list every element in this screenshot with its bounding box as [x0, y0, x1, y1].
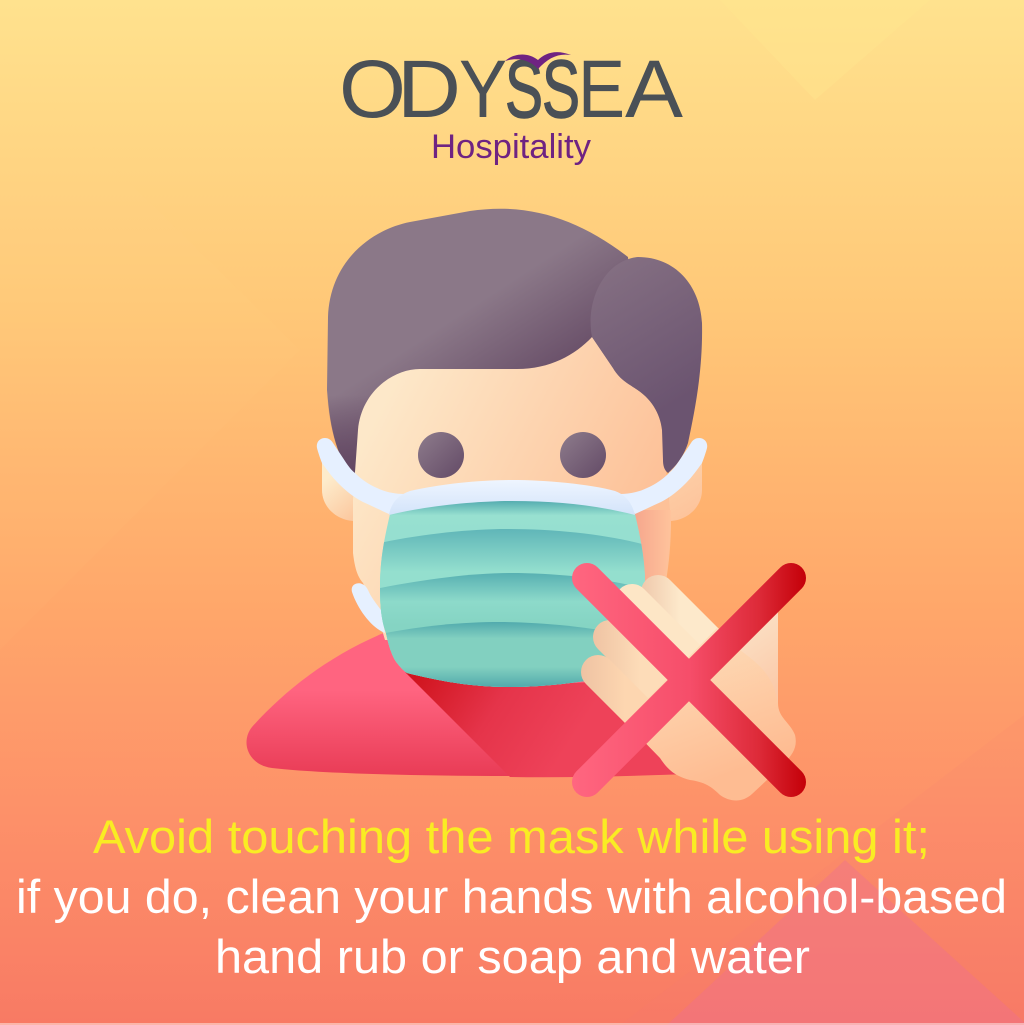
- logo: Odyssea Hospitality: [339, 44, 683, 166]
- pleats: [375, 495, 650, 690]
- mask straps: [317, 438, 707, 633]
- hand: [598, 576, 796, 800]
- face and neck: [353, 337, 671, 640]
- shirt: [246, 632, 700, 777]
- wrist: [712, 576, 778, 710]
- surgical mask: [375, 480, 650, 690]
- logo wordmark: S: [542, 44, 580, 135]
- logo subtitle: Hospitality: [431, 128, 591, 166]
- illustration: man touching mask: [246, 209, 796, 800]
- hair curl: [591, 257, 702, 473]
- body line 2: hand rub or soap and water: [215, 930, 810, 983]
- message text: [16, 810, 1007, 983]
- red cross mark: [587, 578, 791, 782]
- hair: [327, 209, 640, 480]
- logo wordmark: O: [339, 44, 406, 135]
- logo wordmark: E: [578, 44, 625, 135]
- logo bird mark: [505, 52, 571, 69]
- nose band: [389, 480, 635, 515]
- fingers: [598, 592, 722, 719]
- eyes: [418, 432, 606, 478]
- body line 1: if you do, clean your hands with alcohol-based: [16, 870, 1007, 923]
- logo wordmark: S: [505, 44, 543, 135]
- logo wordmark: [339, 44, 683, 135]
- logo wordmark: D: [397, 44, 461, 135]
- headline in yellow: Avoid touching the mask while using it;: [93, 810, 930, 863]
- palm: [625, 628, 796, 800]
- logo wordmark: A: [625, 44, 683, 135]
- ears: [322, 460, 702, 521]
- logo wordmark: Y: [459, 44, 507, 135]
